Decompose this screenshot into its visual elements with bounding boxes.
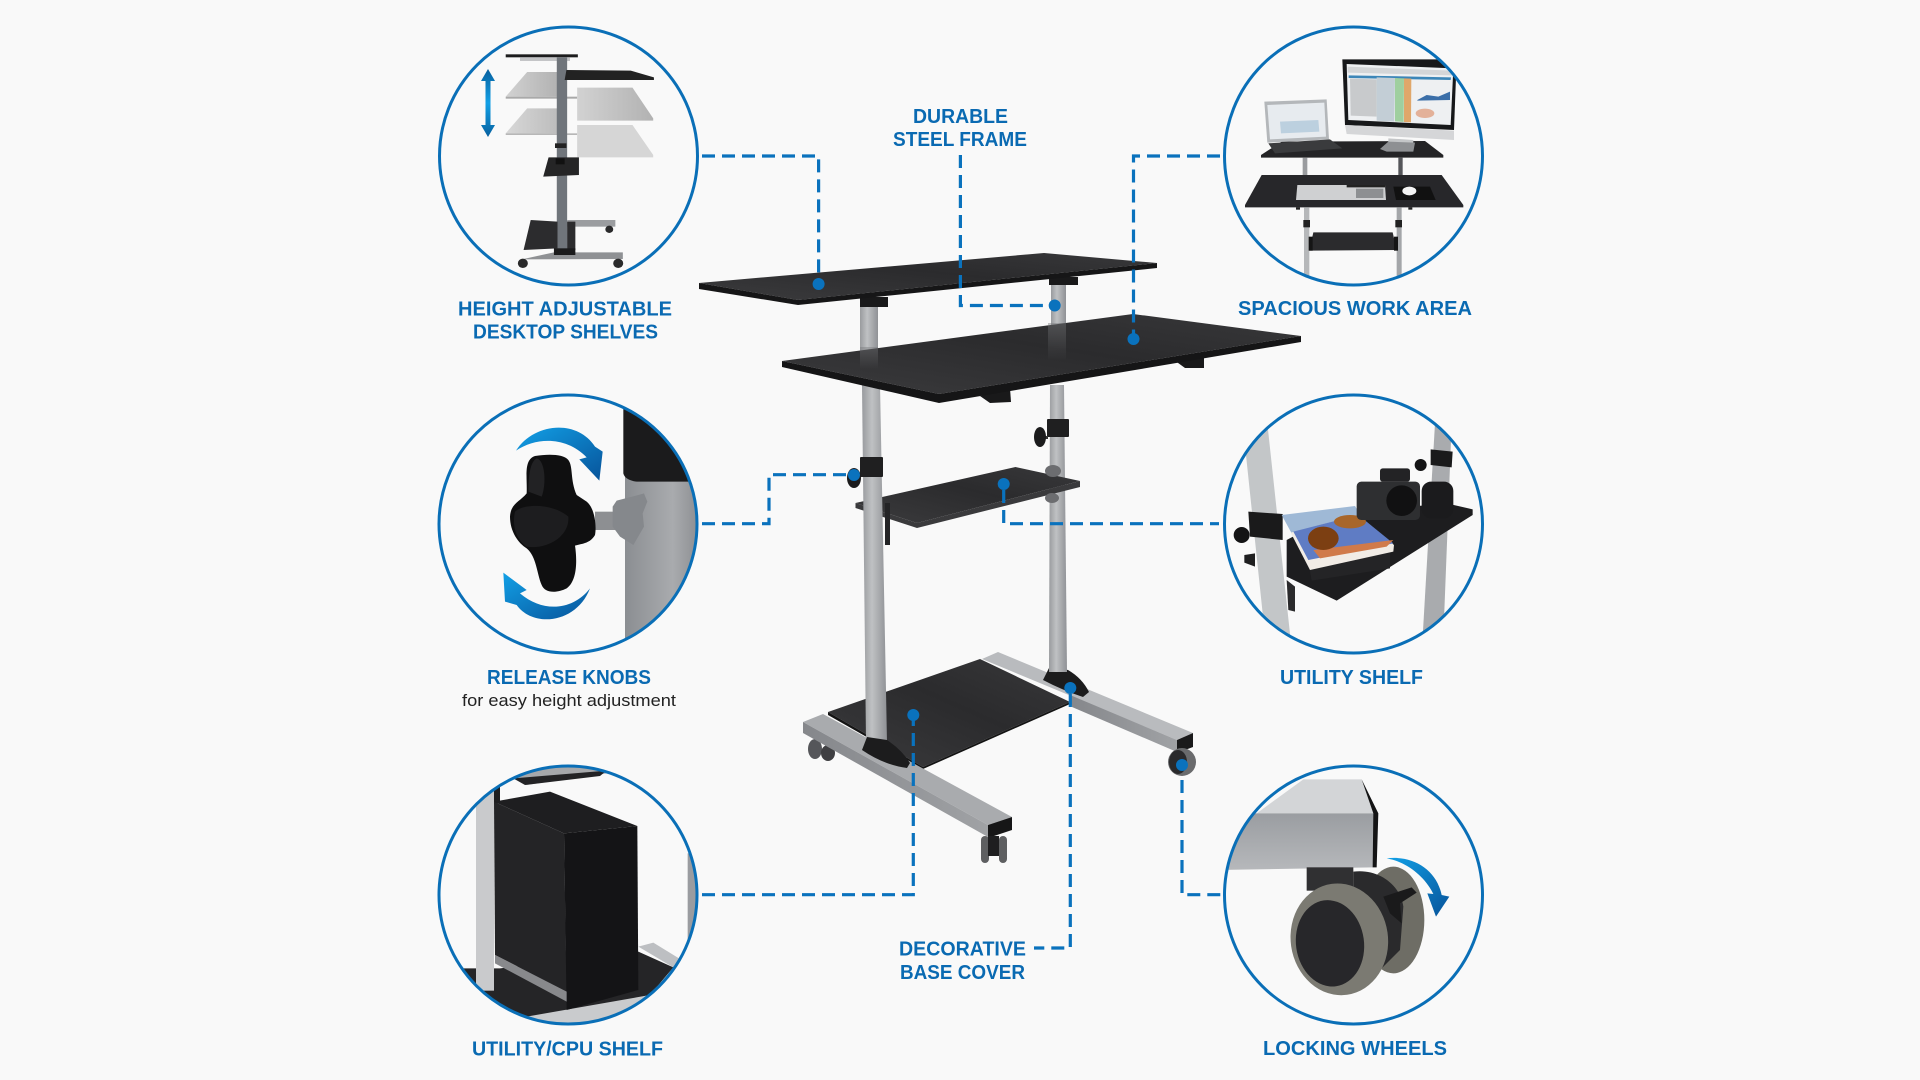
ring [1224,766,1482,1024]
icon: rotate arrows [503,428,603,619]
product: standing desk [699,253,1301,863]
inset: desk with monitor and laptop [1245,59,1463,277]
heading: height adjustable desktop shelves [458,298,672,344]
left collar and knob [847,457,890,545]
inset: shelf with books and camera [1234,423,1473,640]
left post [862,385,887,742]
ring [439,395,697,653]
inset: computer tower on base shelf [463,763,701,1030]
ring [439,766,697,1024]
icon: lock arrow [1387,858,1449,917]
heading: utility shelf: UTILITY SHELF [1280,666,1423,689]
heading: release knobs: for easy height adjustment [462,692,676,710]
upper posts [860,284,1066,354]
inset: shelf positions side view [506,54,654,268]
heading: decorative base cover: BASE COVER [900,961,1025,984]
inset: caster wheel under frame [1217,779,1424,1002]
callout line: locking wheels [1176,759,1224,895]
ring [1224,395,1482,653]
callout line: utility cpu shelf [702,709,919,895]
heading: decorative base cover [899,938,1026,984]
panel: release knobs circle [439,395,707,653]
desk base frame and cover [803,652,1196,863]
panel: height adjustable shelves circle [440,27,698,285]
callout line: height adjustable shelves [702,156,825,290]
panel: spacious work area circle [1224,27,1482,285]
panel: utility cpu shelf circle [439,763,701,1030]
heading: durable steel frame: DURABLE [913,105,1008,128]
heading: release knobs [462,666,676,710]
heading: height adjustable desktop shelves: DESKTOP SHELVES [473,320,658,344]
heading: durable steel frame [893,105,1027,151]
heading: spacious work area: SPACIOUS WORK AREA [1238,297,1472,320]
heading: durable steel frame: STEEL FRAME [893,128,1027,151]
ring [440,27,698,285]
heading: utility cpu shelf: UTILITY/CPU SHELF [472,1038,663,1060]
heading: decorative base cover: DECORATIVE [899,938,1026,960]
right post [1049,385,1067,672]
callout line: spacious work area [1128,156,1220,345]
callout line: durable steel frame [960,155,1061,312]
callout line: release knobs [702,469,860,524]
panel: utility shelf circle [1224,395,1482,653]
callout line: decorative base cover [1034,682,1076,948]
heading: locking wheels: LOCKING WHEELS [1263,1037,1447,1060]
heading: release knobs: RELEASE KNOBS [487,666,651,689]
ring [1224,27,1482,285]
right collar and knob [1034,419,1069,447]
lower desktop [782,314,1301,403]
upper desktop shelf [699,253,1157,307]
icon: vertical double arrow [481,69,495,137]
heading: height adjustable desktop shelves: HEIGHT ADJUSTABLE [458,298,672,320]
middle utility shelf [856,465,1080,528]
callout line: utility shelf [998,478,1219,524]
left post foot [862,737,910,768]
inset: knob on post [510,403,707,643]
panel: locking wheels circle [1217,766,1482,1024]
